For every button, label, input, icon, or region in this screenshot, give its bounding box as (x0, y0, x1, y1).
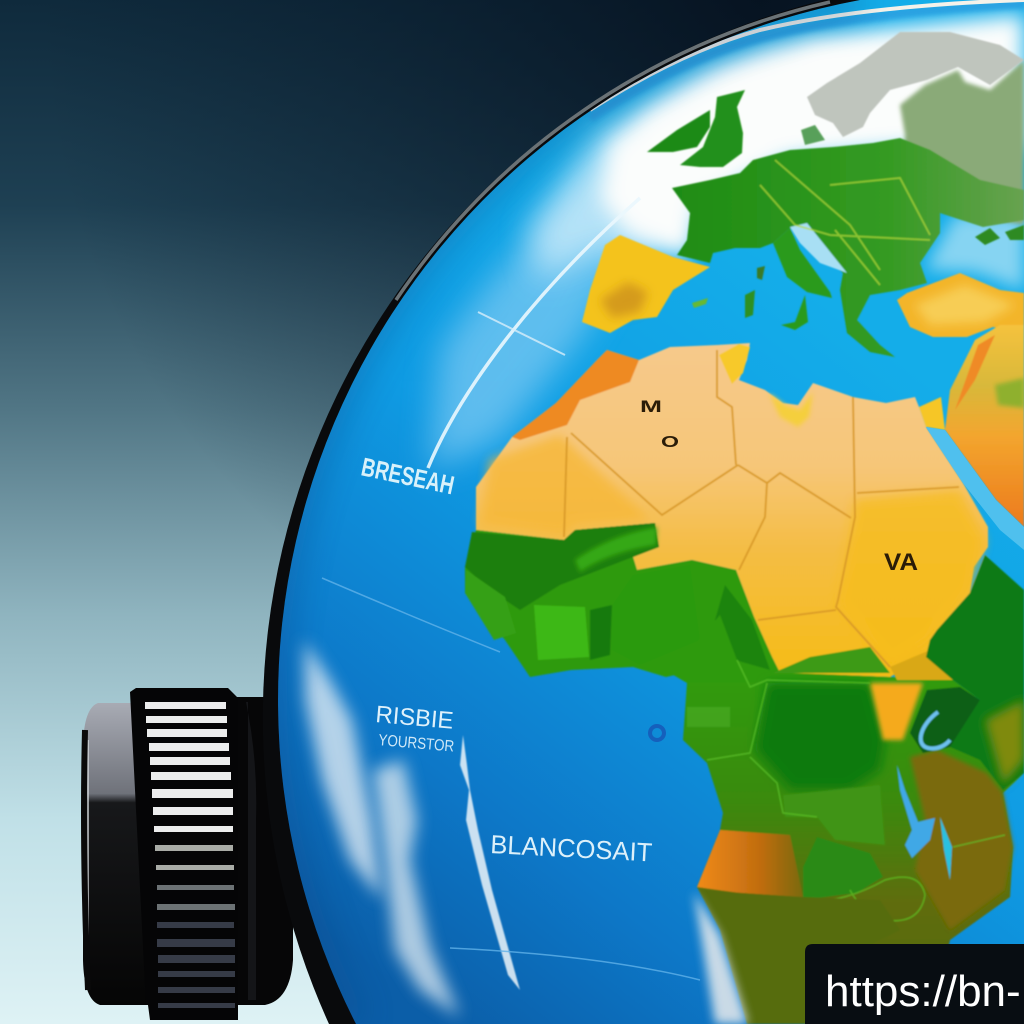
corsica (757, 266, 765, 280)
wisp (460, 735, 520, 990)
sahel west yellow (480, 435, 650, 535)
europe (672, 138, 1024, 357)
south sudan (890, 650, 953, 680)
bright block (534, 605, 589, 660)
watermark url (805, 944, 1024, 1024)
congo dark (755, 683, 885, 790)
hexagon (803, 837, 883, 900)
balearic (692, 298, 708, 308)
panel green (783, 785, 885, 845)
map label: Sahara 2: O (661, 434, 679, 451)
denmark (801, 125, 825, 145)
ireland (647, 110, 710, 152)
malawi (940, 817, 952, 880)
dark nigeria (590, 605, 612, 660)
grid line (478, 312, 565, 355)
globe (263, 0, 1024, 1024)
east olive (910, 750, 1013, 930)
knurled ring (130, 688, 238, 1020)
map label: ocean lower: BLANCOSAIT (490, 829, 653, 867)
orange angola (697, 830, 803, 897)
britain (680, 90, 745, 167)
morocco (512, 350, 639, 440)
north africa sand (476, 343, 988, 677)
red sea (926, 427, 1024, 550)
boundary curves (707, 660, 1005, 921)
rim highlight (396, 2, 830, 300)
road lines (760, 160, 930, 285)
streak (428, 198, 640, 468)
black sea light water (925, 215, 1024, 290)
iberia relief (600, 282, 648, 318)
coast cloud (694, 892, 748, 1024)
sicily (781, 295, 808, 330)
east africa dark (926, 555, 1024, 790)
land group (465, 32, 1024, 1024)
map label: ocean top: BRESEAH (359, 452, 457, 500)
yellow block (870, 683, 923, 740)
south dark (700, 890, 900, 1024)
front barrel (83, 703, 147, 1005)
italy (773, 228, 832, 298)
lake ring (921, 712, 950, 748)
ice halo (530, 40, 800, 280)
mid block (611, 565, 700, 665)
sudan yellow (838, 490, 985, 665)
arabia (945, 325, 1024, 527)
tanganyika (897, 765, 935, 858)
central africa (670, 615, 1024, 1024)
sardinia (745, 290, 755, 318)
cloud lower (373, 760, 460, 1017)
scandinavia (807, 32, 1024, 137)
clouds (304, 640, 382, 900)
arctic ice (600, 14, 1024, 258)
band (773, 647, 890, 673)
iberia (582, 235, 710, 333)
country borders (564, 350, 959, 667)
lens barrel (83, 688, 293, 1020)
map label: ocean sub: YOURSTOR (378, 732, 455, 756)
libya coast (769, 392, 813, 427)
crimea (975, 225, 1024, 245)
west africa green (465, 523, 780, 684)
map label: ocean middle: RISBIE (374, 701, 455, 735)
russia soft land (900, 60, 1024, 225)
globe rim (263, 0, 1024, 1024)
tunisia (719, 344, 750, 384)
edge shading (274, 0, 860, 1024)
sinai (919, 397, 945, 430)
adriatic (790, 223, 847, 273)
guinea (465, 570, 516, 640)
latitude lines (322, 578, 700, 980)
map marker (650, 726, 664, 740)
rear barrel (225, 697, 293, 1005)
ocean highlight upper (414, 192, 644, 479)
lower rim stripe (310, 987, 343, 1024)
label block (687, 707, 730, 727)
victoria oval (910, 687, 980, 753)
turkey (897, 273, 1024, 337)
watermark url: https://bn- (825, 967, 1021, 1016)
sahel stripe (575, 527, 657, 572)
map label: Sahara: M (640, 397, 662, 416)
edge band (590, 4, 1024, 118)
ocean (278, 0, 1024, 1024)
sahel dark (465, 523, 659, 610)
map label: Sudan: VA (884, 549, 918, 576)
